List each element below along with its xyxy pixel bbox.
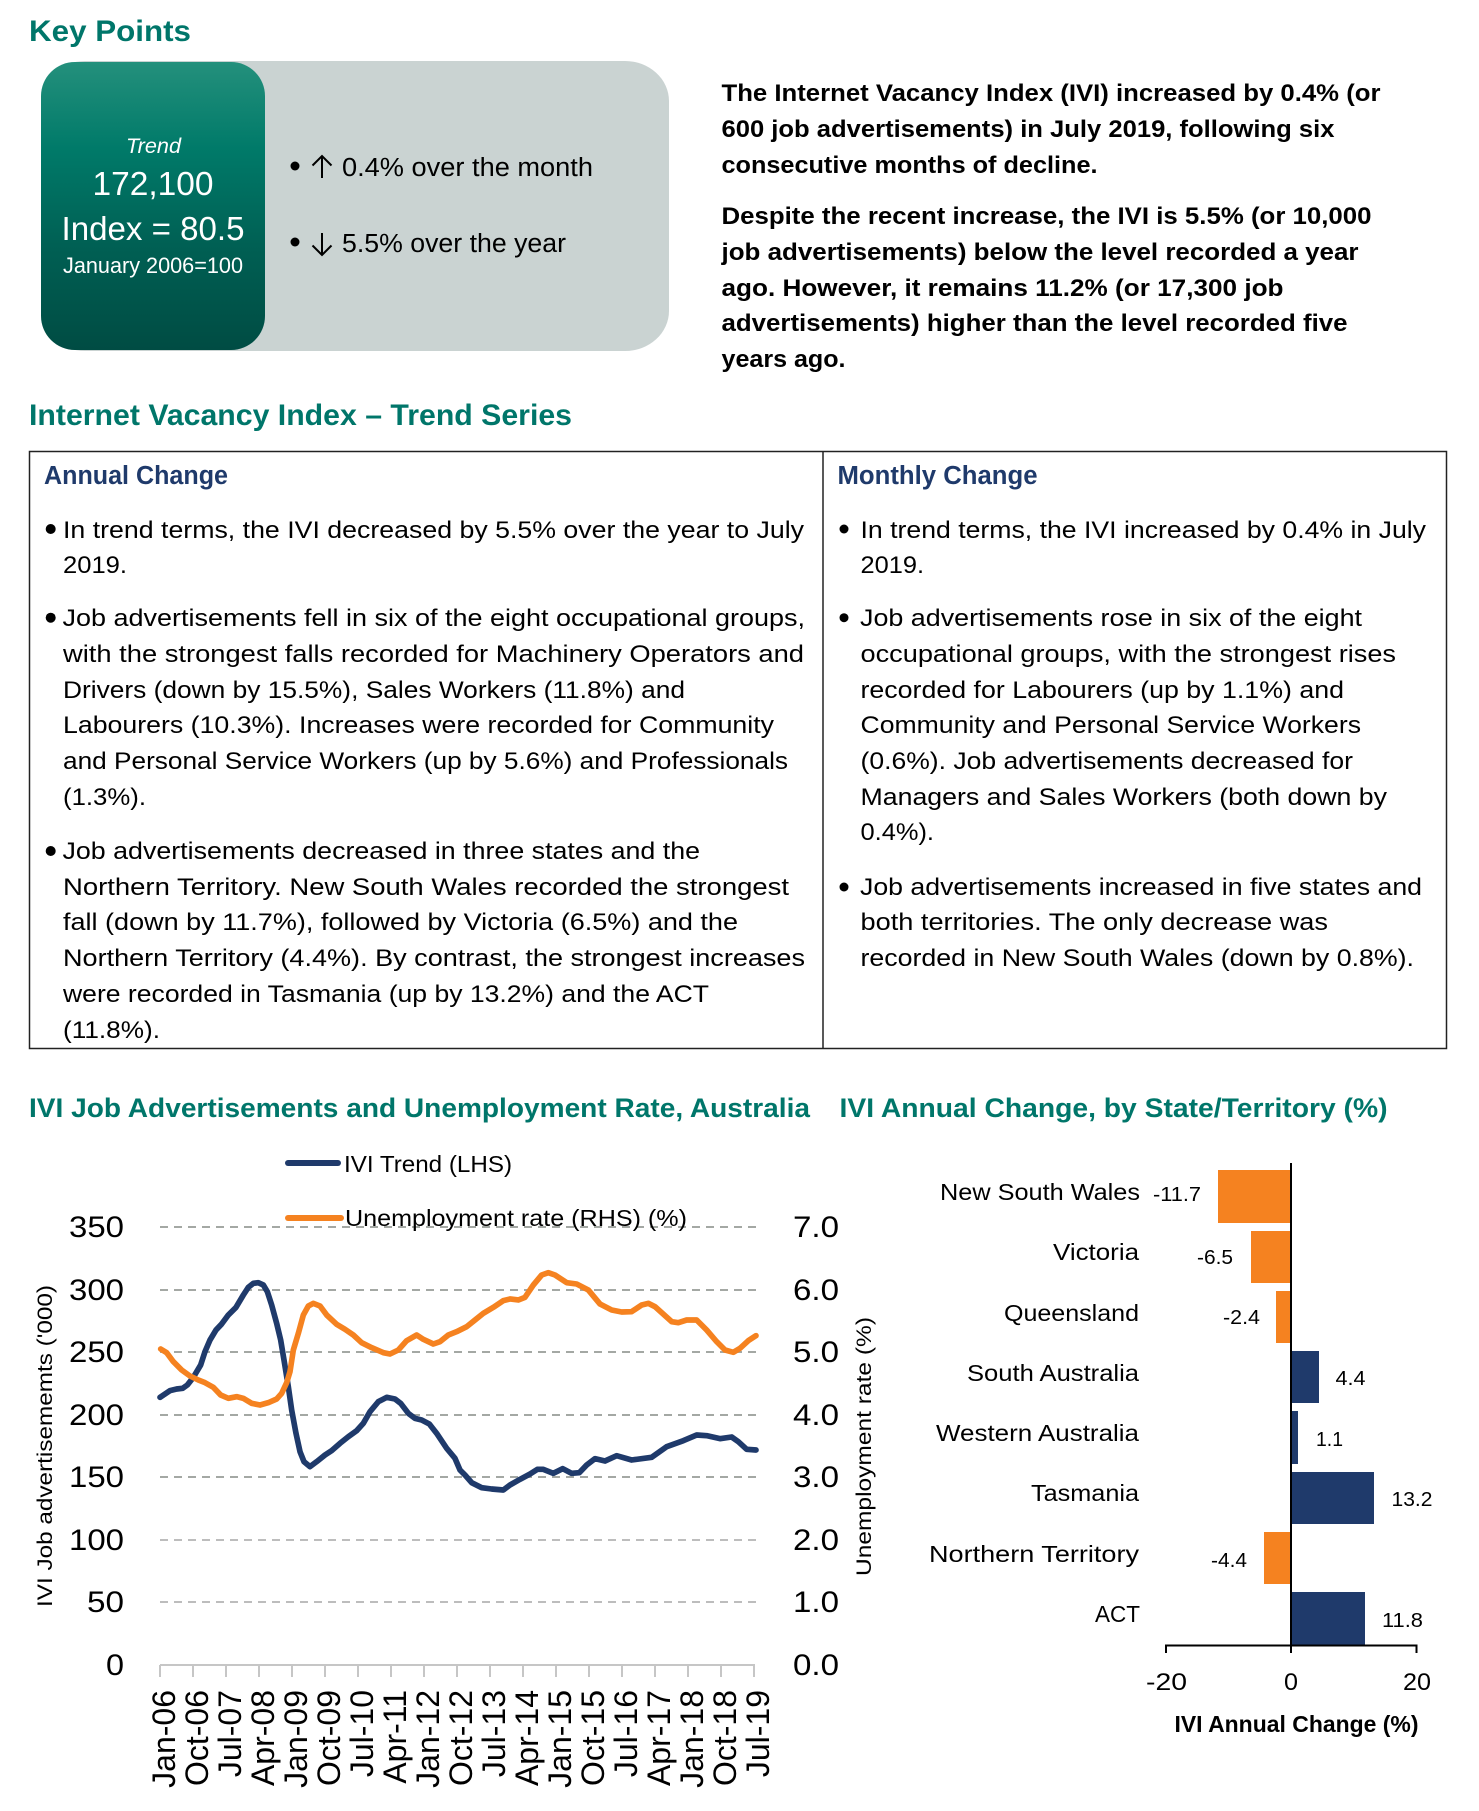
bar: Northern Territory <box>929 1532 1291 1584</box>
panel: annual change: Northern Territory (4.4%). By contrast, the strongest increases <box>63 945 805 972</box>
value axis labels <box>1146 1669 1431 1696</box>
right axis labels: 1.0 <box>793 1586 839 1619</box>
right axis labels: 0.0 <box>793 1649 839 1682</box>
bar: Northern Territory: Northern Territory <box>929 1541 1139 1567</box>
panel: annual change: were recorded in Tasmania (up by 13.2%) and the ACT <box>62 981 709 1008</box>
x axis labels: Jul-13 <box>476 1690 512 1777</box>
panel: annual change: Drivers (down by 15.5%), Sales Workers (11.8%) and <box>63 677 685 704</box>
legend: IVI trend: IVI Trend (LHS) <box>344 1151 512 1177</box>
x axis labels: Oct-18 <box>707 1690 743 1786</box>
panel: trend figures <box>41 62 265 350</box>
value axis labels: 0 <box>1284 1669 1298 1696</box>
bar: Queensland: -2.4 <box>1223 1306 1260 1329</box>
panel: annual change: Job advertisements fell in six of the eight occupational groups, <box>62 605 805 632</box>
heading: job advertisements and unemployment chart: IVI Job Advertisements and Unemployment Rate, Australia <box>29 1093 810 1123</box>
panel: monthly change: recorded in New South Wales (down by 0.8%). <box>860 945 1414 972</box>
left axis labels: 300 <box>69 1274 124 1307</box>
panel: monthly change: Managers and Sales Workers (both down by <box>860 784 1388 811</box>
left axis title: IVI Job advertisememts ('000) <box>33 1285 57 1607</box>
panel: annual change: Job advertisements decreased in three states and the <box>62 838 700 865</box>
panel: annual change: (11.8%). <box>63 1017 160 1044</box>
legend: unemployment rate: Unemployment rate (RHS) (%) <box>345 1205 687 1231</box>
x axis labels: Jul-16 <box>608 1690 644 1777</box>
series: unemployment rate line <box>161 1273 756 1405</box>
text block: key points commentary: years ago. <box>722 346 846 373</box>
panel: monthly change: In trend terms, the IVI increased by 0.4% in July <box>860 517 1427 544</box>
panel: annual change: Annual Change <box>44 462 228 490</box>
bar: ACT <box>1095 1592 1423 1645</box>
text block: key points commentary: consecutive months of decline. <box>722 152 1098 179</box>
bar: Northern Territory: -4.4 <box>1211 1549 1247 1572</box>
x axis labels: Jul-10 <box>344 1690 380 1777</box>
bar: Western Australia <box>936 1411 1343 1464</box>
bar: Western Australia: 1.1 <box>1316 1428 1343 1451</box>
bar: South Australia: 4.4 <box>1336 1367 1366 1390</box>
x axis labels: Oct-06 <box>179 1690 215 1786</box>
right axis title: Unemployment rate (%) <box>852 1317 876 1576</box>
bar: Queensland <box>1004 1291 1291 1343</box>
bar chart: annual change by state <box>929 1163 1432 1737</box>
panel: monthly change: recorded for Labourers (up by 1.1%) and <box>860 677 1344 704</box>
x axis labels: Apr-14 <box>509 1690 545 1786</box>
x axis labels: Apr-17 <box>641 1690 677 1786</box>
left axis labels: 150 <box>69 1461 124 1494</box>
text block: key points commentary: 600 job advertisements) in July 2019, following six <box>722 116 1335 143</box>
panel: monthly change: both territories. The only decrease was <box>860 909 1328 936</box>
x axis labels: Oct-15 <box>575 1690 611 1786</box>
x axis labels: Jan-18 <box>674 1690 710 1788</box>
panel: annual change: fall (down by 11.7%), followed by Victoria (6.5%) and the <box>63 909 738 936</box>
value axis title: IVI Annual Change (%) <box>1174 1711 1418 1737</box>
left axis labels: 350 <box>69 1211 124 1244</box>
left axis labels: 100 <box>69 1524 124 1557</box>
bar: ACT: 11.8 <box>1382 1609 1423 1632</box>
panel: trend figures: January 2006=100 <box>63 253 243 278</box>
panel: monthly change: occupational groups, with the strongest rises <box>860 641 1396 668</box>
x axis labels: Apr-11 <box>377 1690 413 1784</box>
right axis labels: 5.0 <box>793 1336 839 1369</box>
x axis labels: Jan-09 <box>278 1690 314 1788</box>
panel: monthly change <box>838 462 1427 972</box>
right axis labels: 7.0 <box>793 1211 839 1244</box>
line chart: IVI and unemployment rate <box>33 1151 876 1788</box>
panel: key points summary card <box>41 61 669 351</box>
text block: key points commentary: Despite the recent increase, the IVI is 5.5% (or 10,000 <box>722 203 1372 230</box>
left axis labels: 0 <box>106 1649 124 1682</box>
panel: monthly change: 0.4%). <box>860 819 934 846</box>
panel: annual change: Northern Territory. New South Wales recorded the strongest <box>63 874 789 901</box>
panel: monthly change: Job advertisements increased in five states and <box>860 874 1422 901</box>
bar: New South Wales <box>940 1170 1291 1223</box>
value axis labels: -20 <box>1146 1669 1187 1696</box>
x axis labels: Oct-09 <box>311 1690 347 1786</box>
right axis labels: 6.0 <box>793 1274 839 1307</box>
text block: key points commentary: advertisements) higher than the level recorded five <box>722 310 1348 337</box>
bar: Victoria <box>1053 1231 1291 1283</box>
series: IVI trend line <box>160 1283 756 1490</box>
panel: annual change: In trend terms, the IVI decreased by 5.5% over the year to July <box>63 517 805 544</box>
panel: monthly change: Job advertisements rose in six of the eight <box>860 605 1362 632</box>
panel: monthly change: 2019. <box>860 552 924 579</box>
panel: annual change: and Personal Service Workers (up by 5.6%) and Professionals <box>63 748 788 775</box>
value axis labels: 20 <box>1403 1669 1431 1696</box>
text block: key points commentary: ago. However, it remains 11.2% (or 17,300 job <box>722 275 1284 302</box>
left axis labels: 250 <box>69 1336 124 1369</box>
bar: Tasmania: Tasmania <box>1031 1480 1140 1506</box>
panel: monthly change: Community and Personal Service Workers <box>860 712 1361 739</box>
bar: Tasmania: 13.2 <box>1392 1488 1432 1511</box>
x axis labels: Jan-06 <box>146 1690 182 1788</box>
text block: key points commentary <box>720 80 1381 373</box>
heading: Internet Vacancy Index trend series: Internet Vacancy Index – Trend Series <box>29 399 572 432</box>
heading: annual change by state chart: IVI Annual Change, by State/Territory (%) <box>840 1093 1388 1123</box>
gridlines <box>160 1227 756 1602</box>
text block: key points commentary: job advertisements) below the level recorded a year <box>720 239 1359 266</box>
panel: trend figures: Trend <box>126 135 182 158</box>
bar: ACT: ACT <box>1095 1601 1140 1627</box>
bar: South Australia: South Australia <box>967 1360 1140 1386</box>
bar: New South Wales: New South Wales <box>940 1179 1140 1205</box>
panel: trend commentary table <box>30 452 1446 1048</box>
monthly movement: 0.4% over the month <box>342 154 593 182</box>
bar: New South Wales: -11.7 <box>1153 1183 1201 1206</box>
x axis labels <box>146 1690 776 1788</box>
card background <box>41 61 669 351</box>
bar: Queensland: Queensland <box>1004 1300 1139 1326</box>
right axis labels <box>793 1211 839 1682</box>
bar: Western Australia: Western Australia <box>936 1420 1140 1446</box>
x axis <box>160 1665 755 1677</box>
panel: monthly change: Monthly Change <box>838 462 1038 490</box>
x axis labels: Jul-19 <box>740 1690 776 1777</box>
text block: key points commentary: The Internet Vacancy Index (IVI) increased by 0.4% (or <box>722 80 1381 107</box>
right axis labels: 4.0 <box>793 1399 839 1432</box>
heading: Key Points: Key Points <box>29 15 191 48</box>
panel: monthly change: (0.6%). Job advertisements decreased for <box>860 748 1353 775</box>
right axis labels: 3.0 <box>793 1461 839 1494</box>
right axis labels: 2.0 <box>793 1524 839 1557</box>
x axis labels: Apr-08 <box>245 1690 281 1786</box>
x axis labels: Jan-12 <box>410 1690 446 1788</box>
x axis labels: Oct-12 <box>443 1690 479 1786</box>
bar: South Australia <box>967 1351 1366 1403</box>
panel: annual change <box>44 462 805 1044</box>
panel: annual change: Labourers (10.3%). Increases were recorded for Community <box>63 712 775 739</box>
axes <box>1166 1163 1416 1653</box>
panel: annual change: (1.3%). <box>63 784 146 811</box>
annual movement: 5.5% over the year <box>342 230 567 258</box>
panel: annual change: 2019. <box>63 552 127 579</box>
panel: trend figures: Index = 80.5 <box>62 210 244 247</box>
x axis labels: Jan-15 <box>542 1690 578 1788</box>
left axis labels: 50 <box>87 1586 124 1619</box>
bar: Victoria: Victoria <box>1053 1239 1140 1265</box>
left axis labels: 200 <box>69 1399 124 1432</box>
panel: annual change: with the strongest falls recorded for Machinery Operators and <box>62 641 804 668</box>
bar: Victoria: -6.5 <box>1197 1246 1233 1269</box>
panel: trend figures: 172,100 <box>92 165 214 202</box>
left axis labels <box>69 1211 124 1682</box>
bar: Tasmania <box>1031 1472 1432 1524</box>
x axis labels: Jul-07 <box>212 1690 248 1777</box>
